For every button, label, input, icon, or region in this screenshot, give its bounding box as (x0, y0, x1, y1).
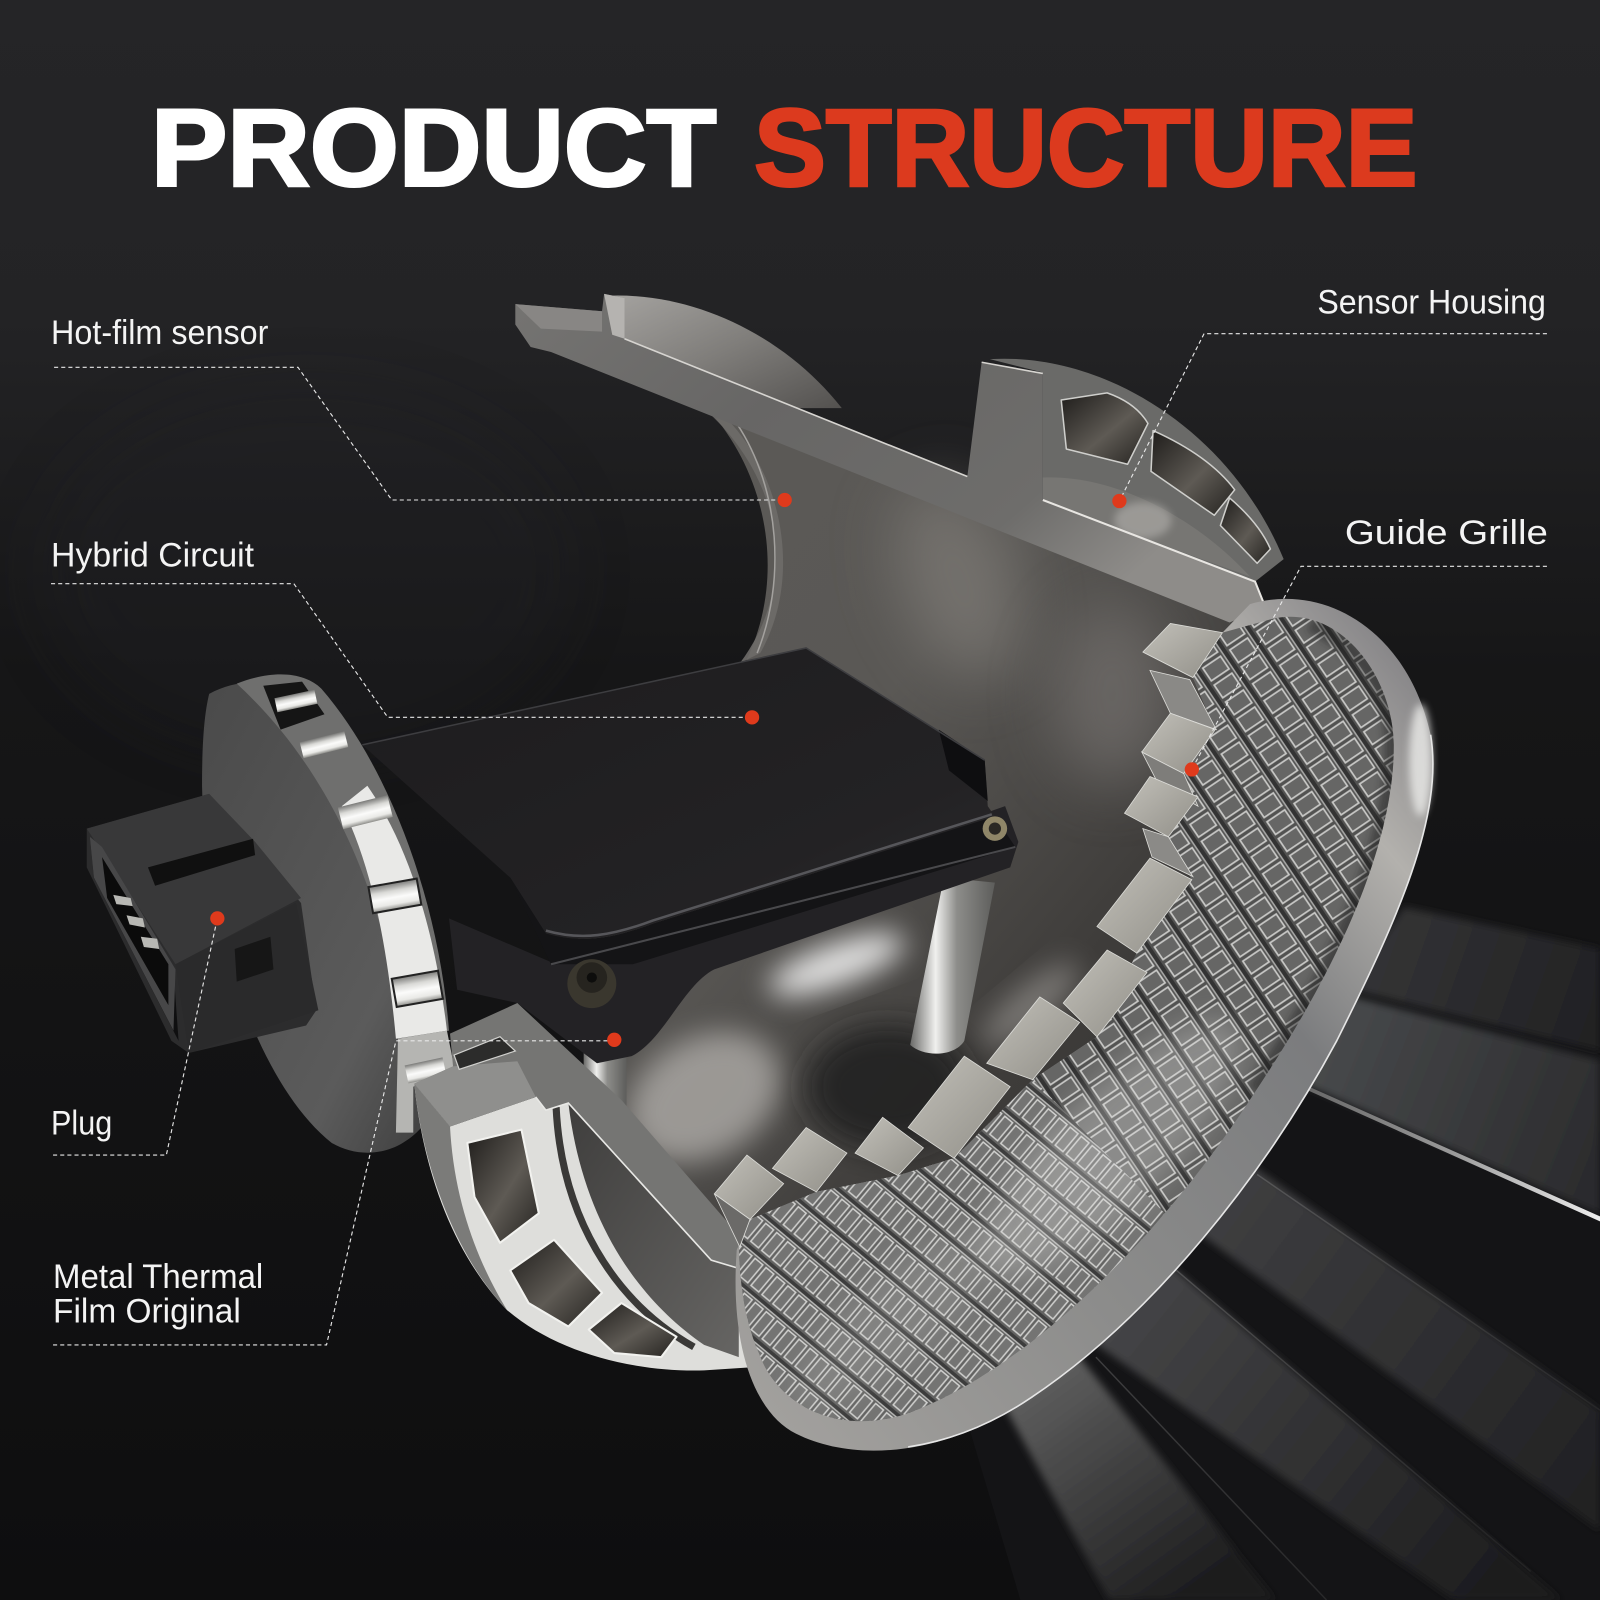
title (151, 88, 1417, 210)
rim highlight (1409, 704, 1432, 816)
label: metal thermal film original (53, 1258, 263, 1330)
hybrid circuit module (362, 648, 1018, 1063)
label: sensor housing: Sensor Housing (1317, 283, 1546, 321)
chrome ring (237, 674, 454, 1133)
product: mass air flow sensor cutaway (87, 294, 1433, 1451)
guide grille mesh (738, 616, 1394, 1422)
upper cut strip (515, 294, 1265, 622)
leader: plug (53, 911, 224, 1155)
plug connector (87, 794, 318, 1053)
stepped grille edge blocks (714, 623, 1222, 1247)
leader: hot-film sensor (54, 367, 792, 507)
leader: hybrid circuit (51, 584, 759, 724)
label: metal thermal film original: Metal Thermal (53, 1258, 263, 1296)
light rays (969, 907, 1600, 1600)
lower ribbed housing section (414, 1003, 750, 1371)
label: guide grille: Guide Grille (1345, 514, 1548, 552)
label: metal thermal film original: Film Original (53, 1292, 241, 1330)
tube interior surface (551, 410, 1265, 1265)
mounting screws (567, 816, 1007, 1008)
glass edge line (908, 735, 1433, 1447)
upper ribbed housing section (990, 359, 1284, 582)
front rim (736, 599, 1433, 1451)
cylindrical post (910, 878, 995, 1054)
label: hot-film sensor: Hot-film sensor (51, 314, 268, 352)
rear shoulder of the tube (604, 296, 842, 408)
end disc (202, 682, 445, 1153)
chrome column below bracket (584, 1051, 627, 1114)
title: PRODUCT (151, 88, 716, 210)
leader: guide grille (1185, 566, 1547, 777)
leader: metal thermal film original (53, 1033, 621, 1345)
leader: sensor housing (1112, 334, 1547, 508)
label: plug: Plug (51, 1105, 112, 1143)
label: hybrid circuit: Hybrid Circuit (51, 536, 254, 574)
title: STRUCTURE (754, 88, 1417, 210)
